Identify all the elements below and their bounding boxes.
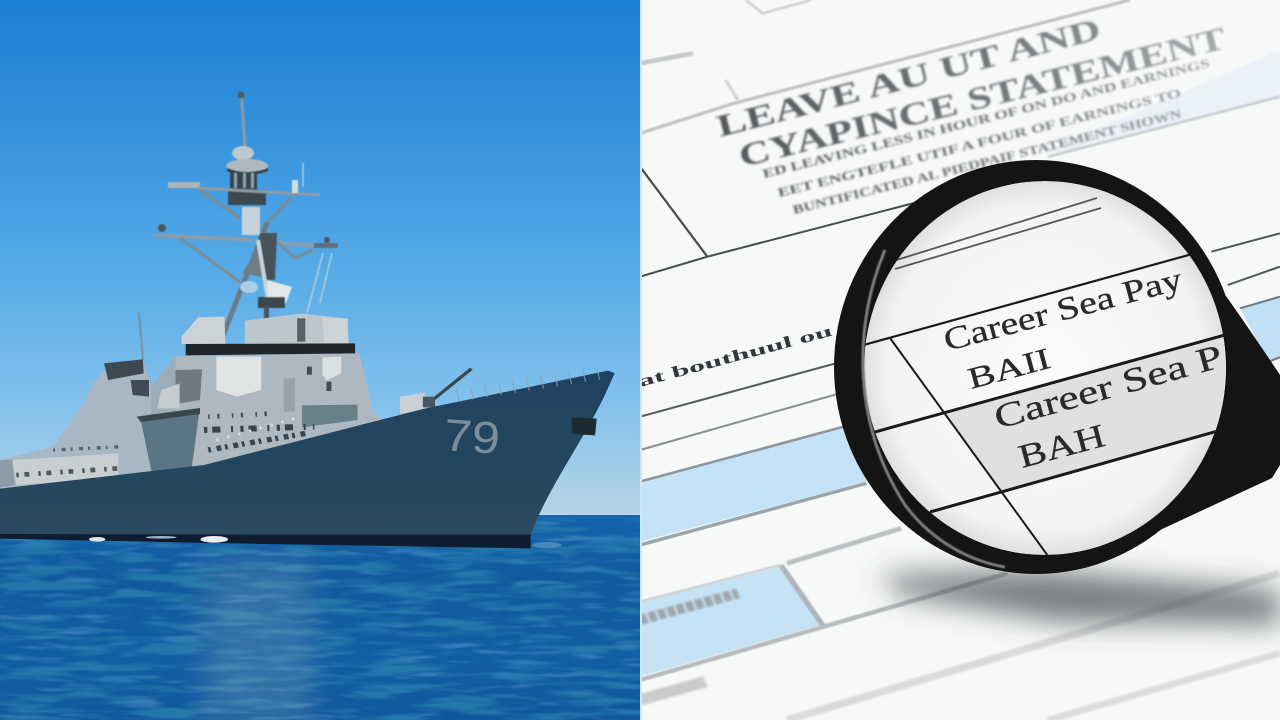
lens rim highlight	[863, 250, 1005, 567]
main superstructure	[137, 313, 384, 474]
lens shadow	[880, 570, 1280, 625]
magnifier frame	[834, 160, 1238, 574]
form small print: ED LEAVING LESS IN HOUR OF ON DO AND EARNINGS	[761, 56, 1211, 181]
shaded row	[942, 335, 1232, 492]
anchor	[571, 417, 597, 435]
lens glass	[860, 181, 1232, 556]
panel divider	[640, 0, 642, 720]
warship	[0, 313, 615, 548]
ocean	[0, 515, 640, 720]
form lines lower	[640, 363, 1280, 720]
hull	[0, 371, 615, 536]
form small print: EET ENGTEFLE UTIF A FOUR OF EARNINGS TO	[776, 86, 1183, 200]
form heading blurred	[714, 20, 1224, 166]
mast	[139, 92, 338, 360]
form small print	[761, 56, 1211, 217]
lens text: BAH upper: BAII	[964, 342, 1054, 396]
deck railing	[457, 372, 608, 395]
sky	[0, 0, 640, 516]
panel: pay statement under magnifier	[637, 0, 1280, 720]
paper	[640, 0, 1280, 720]
magnifier handle	[1160, 296, 1280, 530]
stern superstructure	[0, 359, 152, 489]
lens text: career sea pay lower: Career Sea P	[990, 338, 1227, 437]
waterline shadow	[0, 534, 531, 548]
side row label: at bouthuul ou	[637, 323, 834, 391]
table lines	[860, 198, 1232, 556]
form heading blurred: CYAPINCE STATEMENT	[735, 20, 1229, 174]
hull number: 79	[442, 409, 502, 464]
bow wake	[89, 536, 562, 548]
forward gun	[400, 369, 471, 414]
lens text: BAH lower: BAH	[1015, 418, 1109, 476]
panel: destroyer at sea	[0, 0, 640, 720]
form heading blurred: LEAVE AU UT AND	[713, 11, 1104, 144]
lens text: career sea pay: Career Sea Pay	[940, 260, 1186, 358]
form small print: BUNTIFICATED AL PIEDPAIF STATEMENT SHOWN	[791, 107, 1183, 217]
form lines upper	[640, 0, 1280, 362]
